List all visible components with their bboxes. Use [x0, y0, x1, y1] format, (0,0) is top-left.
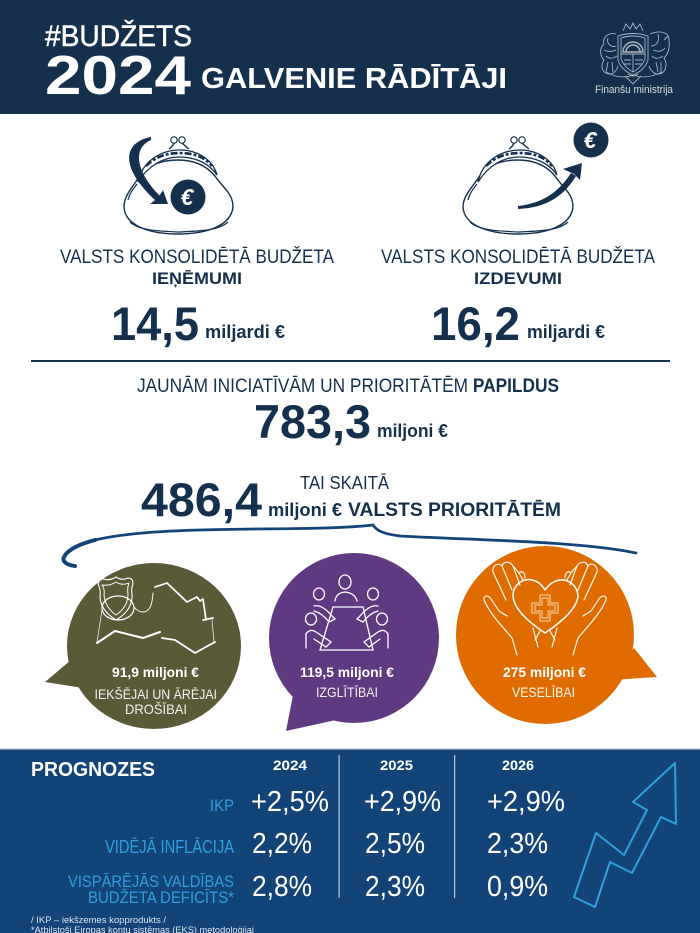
- security label: IEKŠĒJAI UN ĀRĒJAI: [94, 686, 217, 702]
- education label: IZGLĪTĪBAI: [316, 684, 378, 700]
- row: GDP: +2,5%: [251, 786, 329, 818]
- additional funding unit: miljoni €: [377, 421, 448, 441]
- year headers: 2026: [502, 757, 534, 773]
- additional funding value: 783,3: [254, 395, 371, 448]
- row: deficit: VISPĀRĒJĀS VALDĪBAS: [68, 872, 234, 891]
- year headers: [273, 757, 534, 773]
- year headers: 2025: [380, 757, 413, 773]
- panel: revenue: [60, 137, 334, 350]
- expenditure label: VALSTS KONSOLIDĒTĀ BUDŽETA: [381, 246, 655, 268]
- row: GDP: +2,9%: [487, 786, 565, 818]
- row: deficit: [68, 871, 548, 907]
- icon: people around table: [306, 575, 388, 650]
- panel: education bubble: [269, 553, 439, 731]
- row: inflation: VIDĒJĀ INFLĀCIJA: [105, 837, 234, 857]
- including label: TAI SKAITĀ: [300, 473, 389, 493]
- coin: [170, 180, 206, 214]
- icon: hands holding heart with cross: [484, 562, 606, 655]
- right hand: [550, 562, 606, 655]
- coin: [574, 122, 608, 158]
- icon: shield and map of Latvia: [97, 577, 215, 653]
- footnote: GDP: / IKP – iekšzemes kopprodukts /: [31, 915, 167, 925]
- row: GDP: IKP: [210, 796, 234, 815]
- year headers: 2024: [273, 757, 307, 773]
- revenue label: VALSTS KONSOLIDĒTĀ BUDŽETA: [60, 246, 334, 268]
- expenditure value: 16,2: [431, 297, 520, 350]
- state priorities block: [141, 473, 561, 526]
- revenue emphasis: IEŅĒMUMI: [152, 269, 242, 288]
- title: year: 2024: [45, 44, 191, 106]
- panel: forecasts: [0, 748, 700, 933]
- priorities label: VALSTS PRIORITĀTĒM: [348, 500, 561, 521]
- security label line 2: DROŠĪBAI: [125, 701, 187, 717]
- education amount: 119,5 miljoni €: [300, 664, 394, 680]
- icon: purse with incoming coin: [124, 137, 233, 234]
- arrow into purse: [129, 137, 160, 201]
- left hand: [484, 562, 540, 655]
- health amount: 275 miljoni €: [503, 664, 586, 680]
- panel: security bubble: [45, 563, 241, 729]
- row: inflation: 2,2%: [252, 828, 312, 860]
- revenue unit: miljardi €: [205, 322, 285, 342]
- priorities unit: miljoni €: [268, 500, 342, 520]
- row: GDP: [210, 786, 565, 818]
- security amount: 91,9 miljoni €: [112, 664, 199, 680]
- icon: purse with incoming coin: €: [181, 184, 195, 210]
- row: deficit: 2,3%: [365, 871, 425, 903]
- ministry name: Finanšu ministrija: [595, 84, 674, 96]
- arrow out of purse: [518, 173, 576, 209]
- row: inflation: [105, 828, 548, 860]
- revenue value: 14,5: [111, 297, 199, 350]
- expenditure emphasis: IZDEVUMI: [474, 269, 562, 288]
- row: GDP: +2,9%: [364, 786, 441, 818]
- icon: coat of arms: [601, 23, 669, 84]
- header band: [0, 0, 700, 114]
- row: deficit: BUDŽETA DEFICĪTS*: [88, 888, 234, 907]
- icon: purse with outgoing coin: [463, 122, 608, 234]
- row: inflation: 2,5%: [365, 828, 425, 860]
- panel: expenditure: [381, 122, 655, 350]
- expenditure unit: miljardi €: [527, 322, 605, 342]
- icon: rising arrow: [574, 763, 676, 907]
- title: main indicators: GALVENIE RĀDĪTĀJI: [201, 63, 507, 95]
- additional funding block: [137, 376, 559, 448]
- priorities value: 486,4: [141, 473, 262, 526]
- row: inflation: 2,3%: [487, 828, 548, 860]
- title: hashtag: #BUDŽETS: [45, 20, 192, 53]
- brace: [63, 525, 636, 566]
- panel: health bubble: [456, 546, 657, 724]
- additional funding label: JAUNĀM INICIATĪVĀM UN PRIORITĀTĒM PAPILDUS: [137, 376, 559, 397]
- row: deficit: 0,9%: [487, 871, 548, 903]
- row: deficit: 2,8%: [252, 871, 312, 903]
- icon: purse with outgoing coin: €: [584, 127, 598, 153]
- health label: VESELĪBAI: [512, 684, 575, 700]
- forecasts heading: PROGNOZES: [31, 759, 155, 781]
